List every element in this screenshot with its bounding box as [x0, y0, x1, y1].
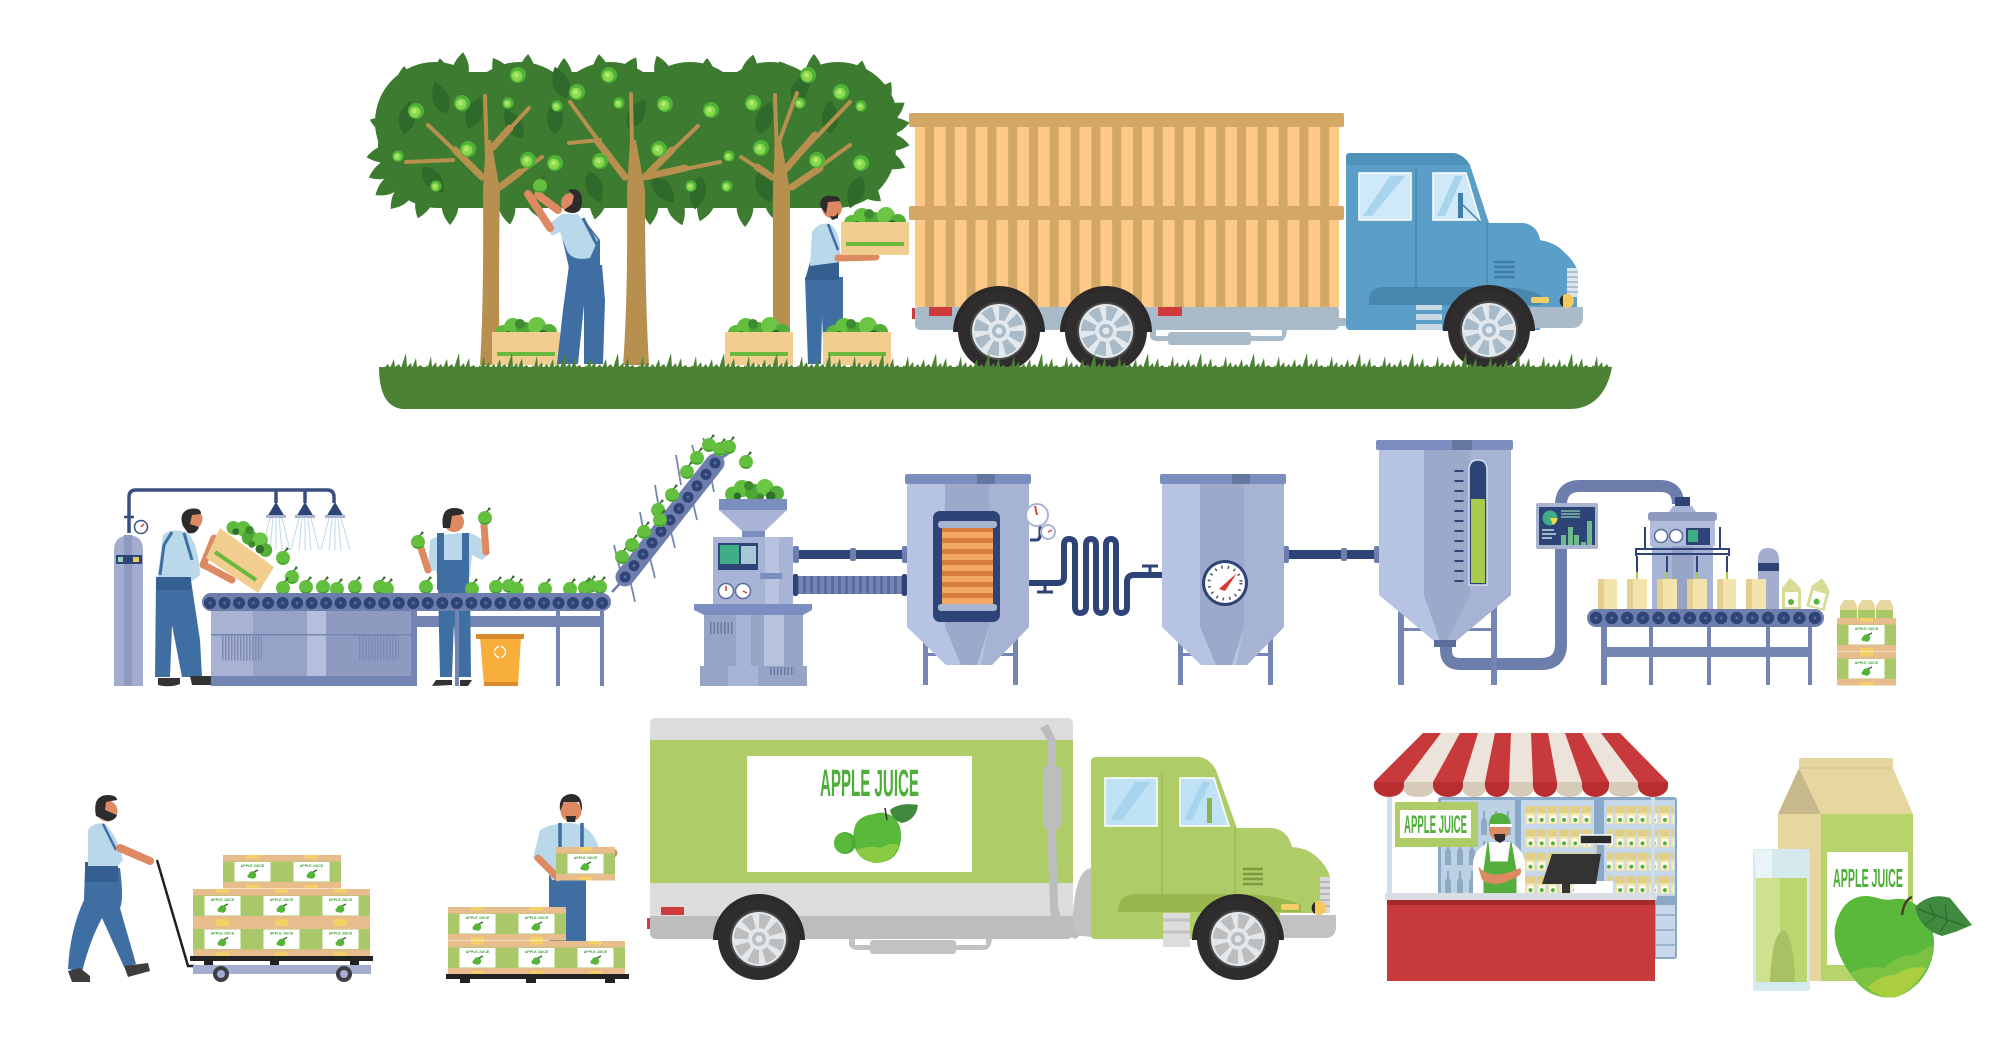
- counter: [1385, 893, 1657, 981]
- juicer machine: [694, 451, 812, 686]
- pressure gauges: [1026, 504, 1055, 540]
- inclined conveyor: [612, 434, 736, 602]
- pipe between tanks: [1283, 546, 1380, 563]
- panel: packing and distribution: APPLE JUICE: [1833, 863, 1903, 893]
- panel: apple harvest: [365, 51, 1612, 409]
- stacked pallet boxes: APPLE JUICE: [241, 864, 265, 868]
- glass of juice: [1753, 849, 1810, 991]
- truck sign: [747, 756, 972, 872]
- crate of apples by second tree: [725, 317, 793, 365]
- delivery truck: [647, 718, 1336, 980]
- seller: [1473, 813, 1525, 893]
- green cab: [1091, 757, 1330, 939]
- holding tank with gauge: [1160, 474, 1286, 685]
- spray nozzles: [267, 502, 344, 517]
- stacked pallet boxes: APPLE JUICE: [211, 932, 235, 936]
- washing conveyor: [211, 611, 604, 686]
- green apple: [1835, 896, 1972, 998]
- undercarriage: [849, 939, 992, 950]
- worker stacking boxes: [533, 794, 618, 945]
- worker picking apples: [528, 175, 605, 364]
- pallet with boxes: APPLE JUICE: [525, 916, 549, 920]
- striped awning: [1374, 733, 1668, 797]
- pallet truck with boxes: [157, 855, 373, 982]
- cooling coil pipe: [1029, 539, 1162, 613]
- tilted apple crate: [206, 513, 278, 593]
- juicer pipes to press tank: [793, 546, 908, 596]
- finished juice cartons: [1782, 576, 1833, 611]
- stacked pallet boxes: APPLE JUICE: [329, 932, 353, 936]
- worker tipping crate: [155, 508, 232, 686]
- sign apples: [834, 804, 918, 863]
- worker loading crate: [805, 196, 876, 364]
- exhaust stack: [1040, 724, 1080, 939]
- stacked pallet boxes: [193, 855, 370, 956]
- crate of apples by second worker: [823, 317, 891, 365]
- crate of apples under first tree: [492, 317, 560, 365]
- gas bottle behind belt: [1758, 548, 1779, 610]
- kiosk sign: [1395, 802, 1478, 847]
- stacked pallet boxes: APPLE JUICE: [329, 898, 353, 902]
- pallet with boxes: APPLE JUICE: [466, 916, 490, 920]
- stacked pallet boxes: APPLE JUICE: [300, 864, 324, 868]
- belt with rollers: [202, 593, 611, 611]
- delivery truck wheels: [713, 894, 1284, 980]
- truck wheels: [953, 285, 1535, 372]
- pallet with boxes: APPLE JUICE: [466, 950, 490, 954]
- press tank: [905, 474, 1055, 685]
- left opening and posts: [1387, 797, 1655, 893]
- press window: [933, 511, 1000, 622]
- carried crate: [841, 207, 909, 255]
- panel: juice production line: [114, 434, 1896, 686]
- recycling bin: [476, 634, 524, 686]
- apple tree canopy: [365, 51, 911, 228]
- orchard truck: [909, 113, 1583, 372]
- gas cylinder with sprayers: [114, 490, 350, 686]
- filling conveyor: [1587, 609, 1824, 685]
- truck chassis: [915, 305, 1339, 330]
- apples on trees: [392, 67, 869, 192]
- tree trunks and branches: [406, 93, 850, 190]
- carried box: APPLE JUICE: [574, 856, 598, 860]
- juice carton: [1778, 758, 1913, 981]
- carried box: [556, 847, 615, 880]
- stacked boxes at end of line: [1837, 600, 1896, 686]
- panel: packing and distribution: [68, 718, 1972, 998]
- cash register: [1542, 835, 1613, 894]
- apples on the belt: [276, 547, 607, 596]
- sorting worker: [411, 507, 492, 686]
- stacked pallet boxes: APPLE JUICE: [270, 932, 294, 936]
- worker pushing pallet truck: [68, 795, 150, 982]
- monitor on pipe: [1536, 503, 1598, 549]
- storage tank with level tube: [1376, 440, 1513, 685]
- stacked pallet boxes: APPLE JUICE: [270, 898, 294, 902]
- filling machine: [1636, 497, 1729, 610]
- darker leaves inside canopy: [396, 64, 869, 211]
- pallet with boxes: APPLE JUICE: [525, 950, 549, 954]
- stacked boxes at end of line: APPLE JUICE: [1855, 627, 1879, 631]
- truck sign: APPLE JUICE: [820, 763, 919, 805]
- wooden cargo body: [915, 127, 1339, 307]
- pallet with boxes: APPLE JUICE: [584, 950, 608, 954]
- back shelves: [1438, 797, 1677, 959]
- pallet with boxes: [446, 907, 629, 983]
- empty juice cartons: [1598, 579, 1766, 609]
- stacked boxes at end of line: APPLE JUICE: [1855, 661, 1879, 665]
- cargo box: [650, 718, 1073, 939]
- grass ground: [379, 350, 1612, 409]
- stacked pallet boxes: APPLE JUICE: [211, 898, 235, 902]
- blue cab: [1346, 153, 1577, 330]
- transfer pipe to filler: [1446, 486, 1678, 664]
- juice kiosk: [1374, 733, 1677, 981]
- juice kiosk: APPLE JUICE: [1404, 811, 1467, 839]
